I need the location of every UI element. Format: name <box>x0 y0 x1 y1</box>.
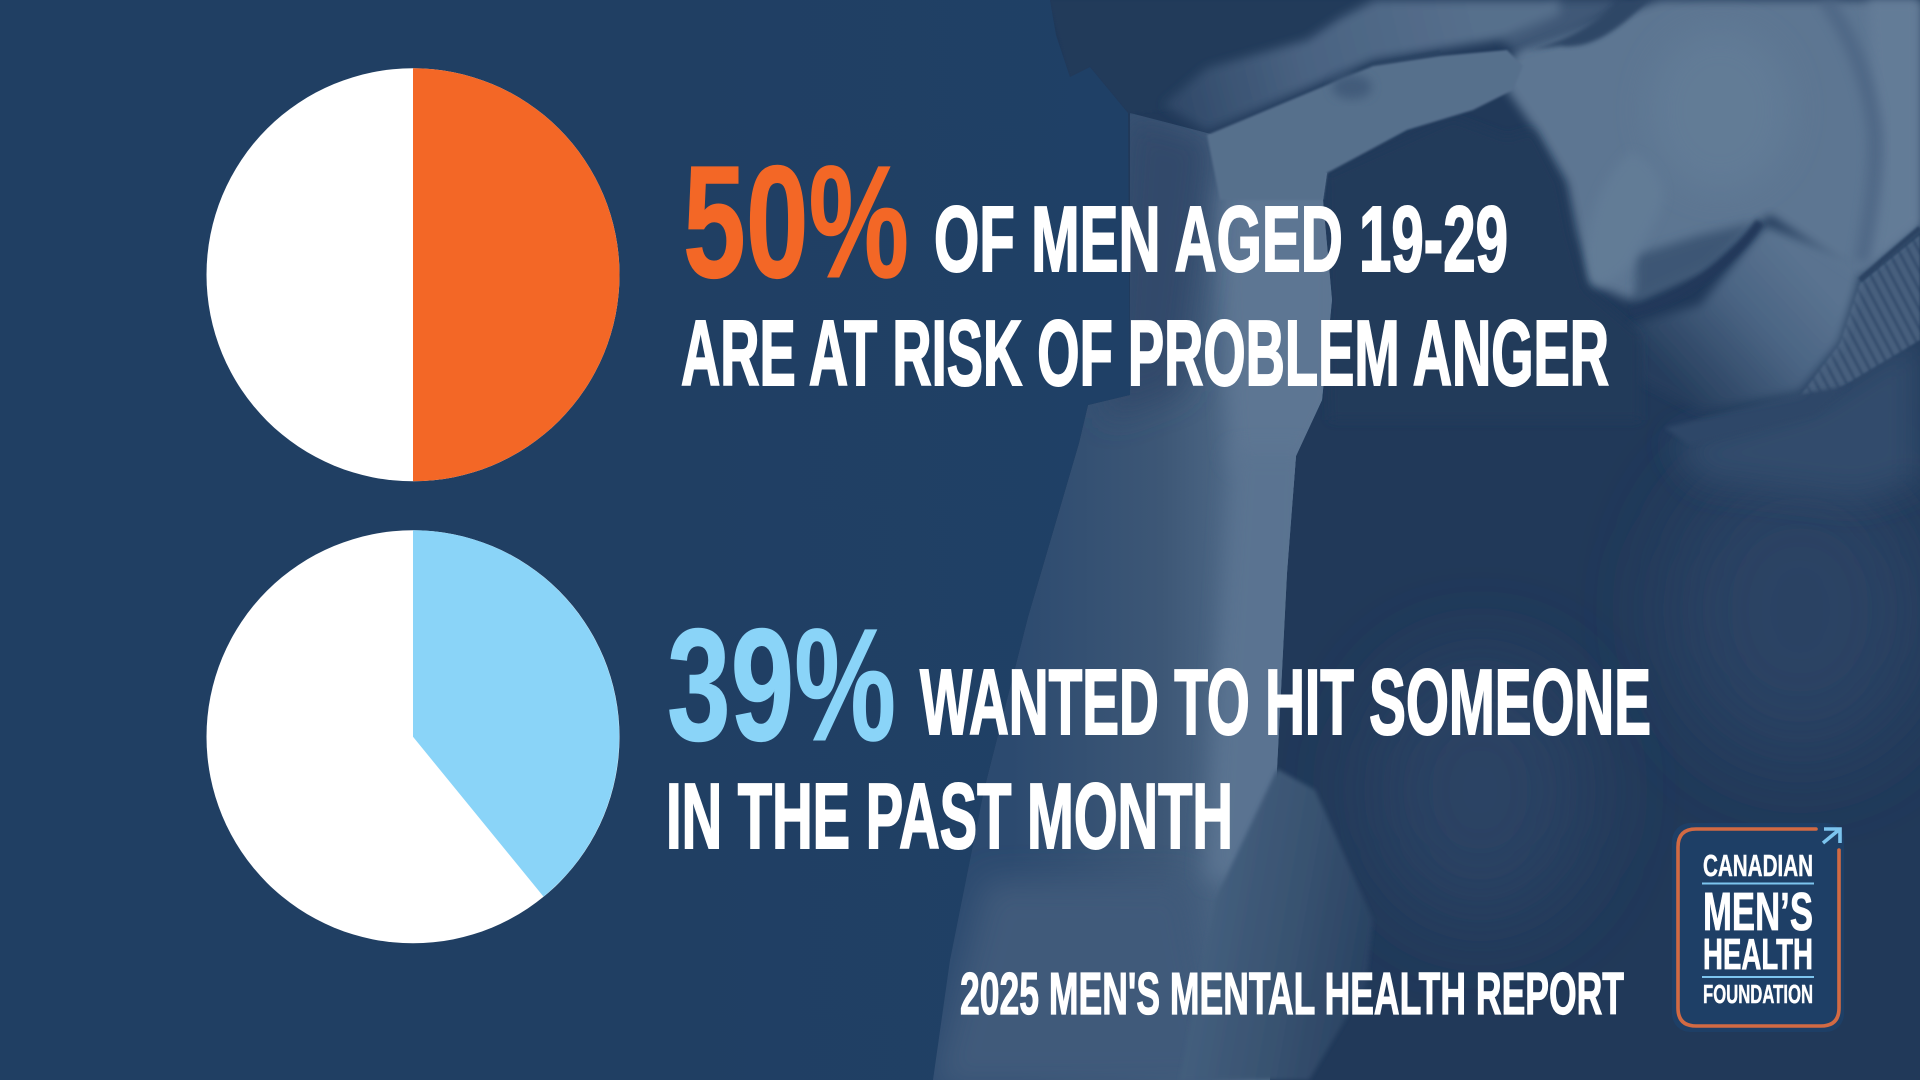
eyelid <box>1500 0 1625 50</box>
logo word: Foundation: FOUNDATION <box>1703 979 1813 1009</box>
lower arm lift <box>934 877 1124 1080</box>
lit band along the palm side of wrist <box>1216 200 1332 466</box>
collar ribs <box>1800 235 1920 396</box>
logo plate <box>1672 823 1844 1032</box>
shadow line between neck and collar <box>1860 228 1920 280</box>
text: of men aged 19-29: OF MEN AGED 19-29 <box>934 187 1508 291</box>
sweater highlight centre <box>1404 700 1556 880</box>
logo: Canadian Men's Health Foundation <box>1672 823 1844 1032</box>
shoulder below collar <box>1682 346 1920 495</box>
mouth line <box>1696 218 1764 280</box>
forehead brighter skin <box>1650 30 1790 190</box>
logo rule <box>1702 882 1814 884</box>
hair and top of head <box>1130 113 1131 114</box>
nose <box>1582 248 1630 288</box>
pie chart: 39% <box>206 530 620 943</box>
sweater highlight right <box>1703 508 1897 722</box>
face <box>1500 0 1920 300</box>
arm base tone <box>933 113 1332 1080</box>
lit band along the forearm <box>1203 478 1294 880</box>
lower finger <box>1207 50 1523 200</box>
logo rule <box>1702 976 1814 978</box>
pie chart: 50% <box>206 68 620 481</box>
stubble sideburn <box>1825 0 1876 262</box>
stat: 50 percent: 50% <box>683 132 909 311</box>
upper lip <box>1635 222 1755 302</box>
dark back of hand edge <box>1122 121 1222 403</box>
dark eye-socket shadow <box>1532 127 1592 288</box>
logo word: Health: HEALTH <box>1703 930 1813 979</box>
slice: 39% light blue <box>413 530 619 897</box>
logo word: Canadian: CANADIAN <box>1703 848 1813 883</box>
logo word: Men's: MEN’S <box>1703 882 1813 942</box>
eye <box>1538 1 1644 50</box>
stat: 39 percent: 39% <box>667 595 896 774</box>
logo orange frame <box>1678 829 1839 1026</box>
sleeve cuff <box>1215 769 1372 1080</box>
collar lower band <box>1669 386 1838 439</box>
chin and jaw <box>1630 225 1862 412</box>
neck behind the stubble <box>1862 0 1920 272</box>
text: in the past month: IN THE PAST MONTH <box>666 764 1233 868</box>
slice: 50% orange <box>413 68 620 481</box>
hand and forearm <box>933 113 1332 1080</box>
knuckle shadow <box>1332 75 1372 99</box>
sweater base <box>1052 0 1920 1080</box>
gap between fingers <box>1245 52 1440 122</box>
icon: arrow <box>1823 829 1840 843</box>
upper finger <box>1163 0 1560 131</box>
photo: man resting his head on his hand, blue duotone <box>900 0 1920 1080</box>
